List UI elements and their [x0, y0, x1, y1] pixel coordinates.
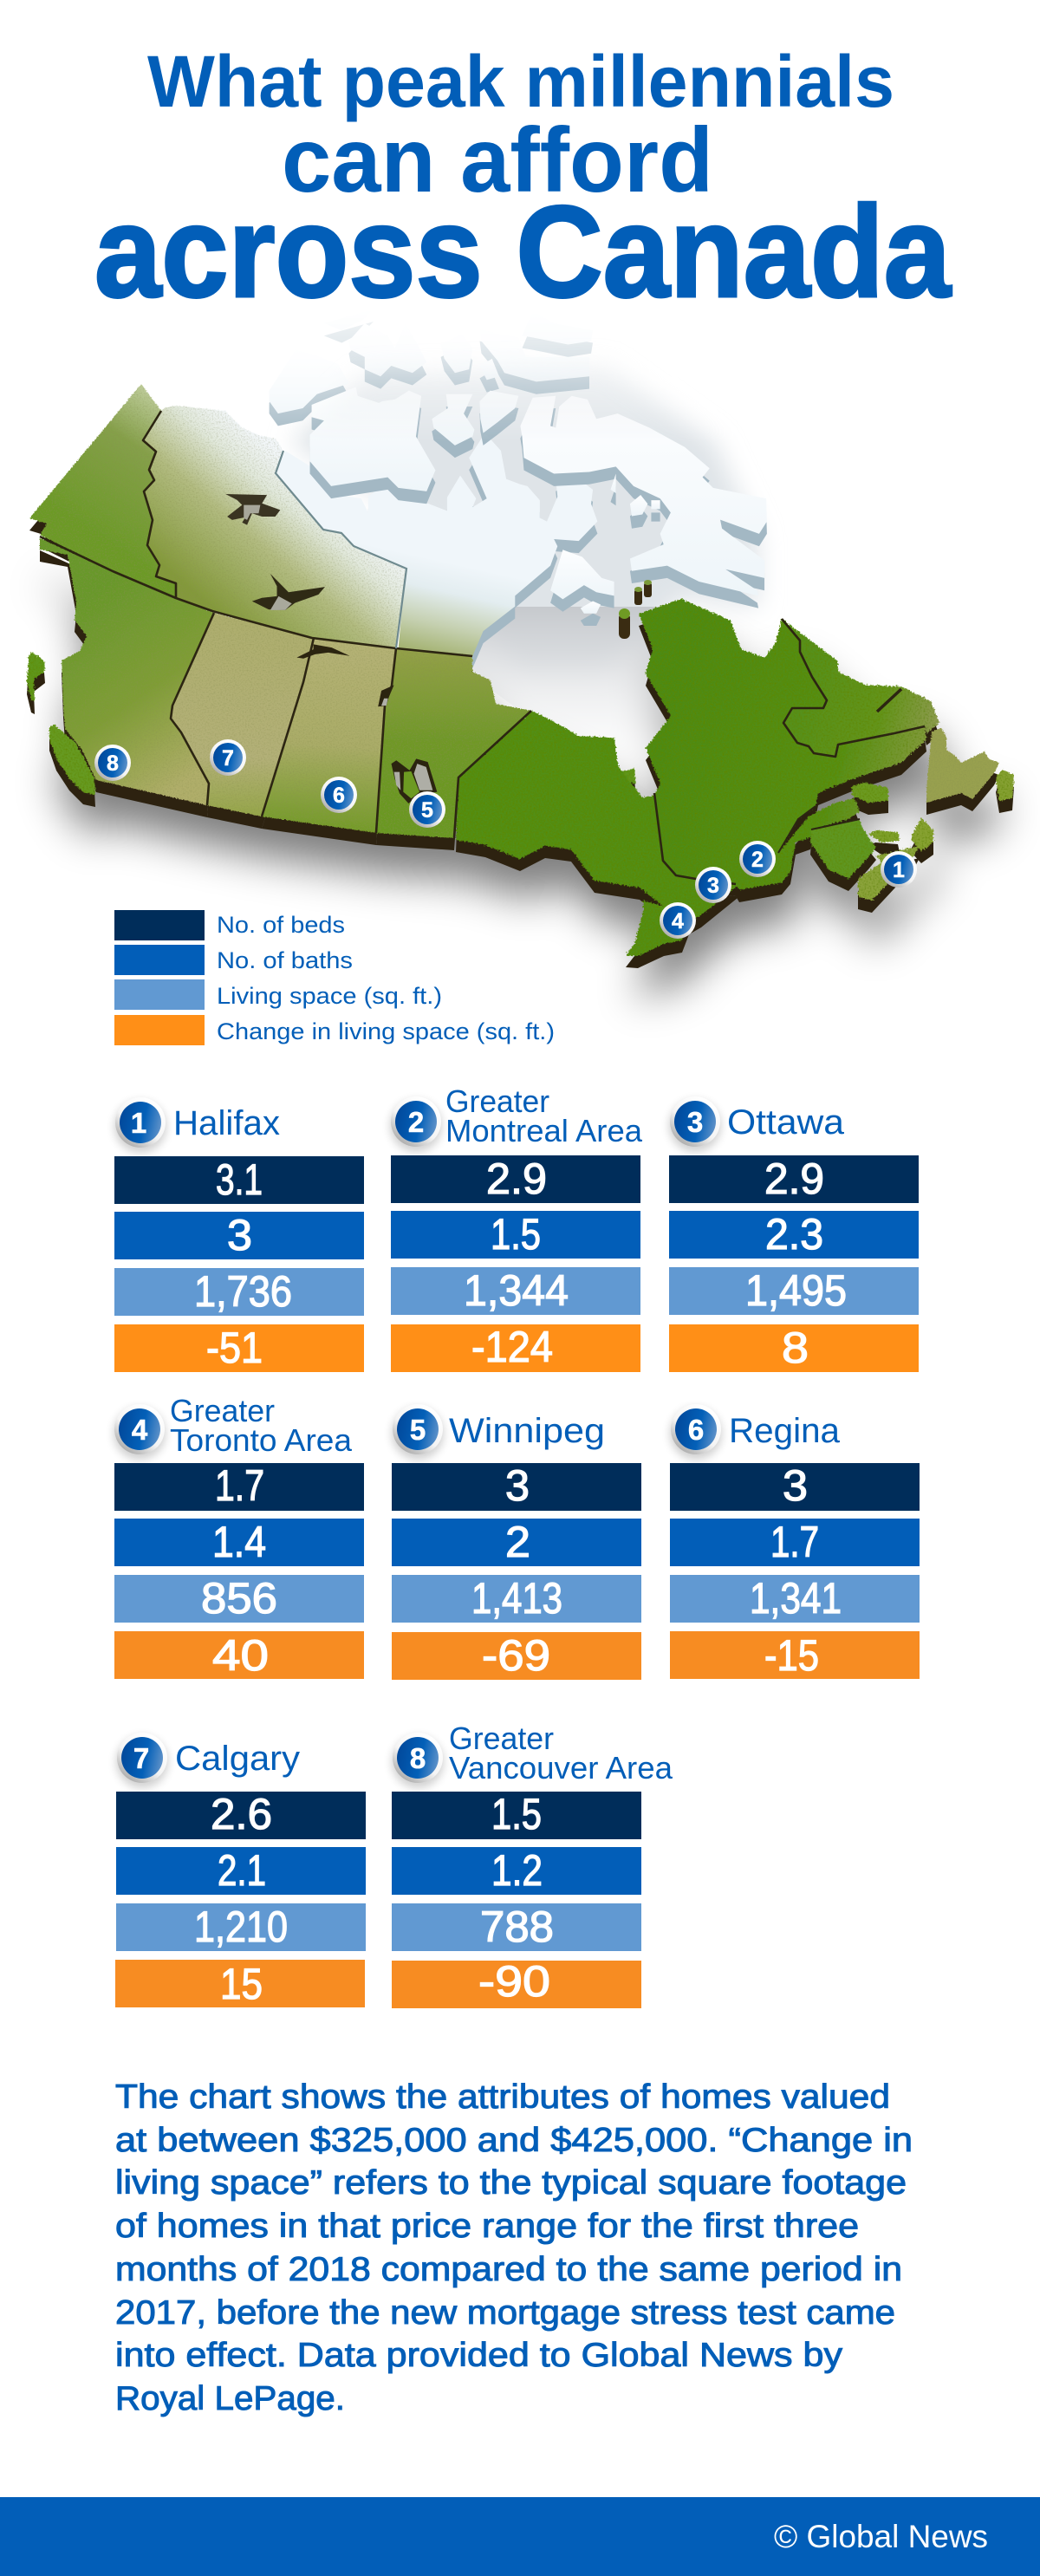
panel: Greater Toronto Area: [114, 1393, 364, 1680]
living space: 856: [201, 1574, 277, 1623]
city name: Halifax: [173, 1104, 280, 1142]
marker 6: Regina: 6: [333, 784, 345, 808]
marker 8: Vancouver: 8: [107, 751, 119, 776]
beds: 3.1: [216, 1155, 263, 1204]
living space: [114, 1267, 364, 1316]
city name: Montreal Area: [445, 1113, 643, 1148]
beds: [114, 1155, 364, 1204]
living space: [391, 1266, 640, 1315]
arctic sea shading: [293, 368, 766, 612]
change: [669, 1324, 919, 1372]
change: [670, 1631, 920, 1680]
explanatory paragraph: [115, 2078, 913, 2417]
baths: [114, 1518, 364, 1566]
prairie provinces and BC: [40, 538, 999, 838]
panel: Regina: [670, 1404, 920, 1680]
baths: [670, 1518, 920, 1566]
explanatory paragraph: of homes in that price range for the first three: [115, 2208, 859, 2245]
title line 3: across Canada: [94, 179, 952, 324]
beds: [114, 1461, 364, 1511]
beds: 1.7: [215, 1461, 264, 1510]
legend: living space: [114, 979, 442, 1010]
change: 15: [220, 1960, 263, 2008]
legend: beds: [114, 910, 345, 940]
marker 1: Halifax: 1: [893, 858, 905, 882]
beds: 1.5: [491, 1790, 542, 1838]
living space: [669, 1266, 919, 1315]
beds: [669, 1155, 919, 1203]
city name: [170, 1393, 353, 1458]
baths: [391, 1210, 640, 1259]
NWT / Nunavut border: [276, 451, 406, 648]
lakes: [225, 494, 437, 803]
explanatory paragraph: living space” refers to the typical square footage: [115, 2164, 907, 2202]
explanatory paragraph: at between $325,000 and $425,000. “Change in: [115, 2122, 913, 2159]
title: [94, 41, 952, 324]
beds: 3: [783, 1461, 808, 1510]
change: 40: [212, 1631, 269, 1680]
marker 4: Toronto: 4: [672, 909, 684, 933]
living space: 1,495: [745, 1266, 847, 1315]
change: [115, 1960, 365, 2008]
lake: Great Slave: [252, 574, 325, 610]
badge 3: 3: [687, 1106, 703, 1138]
baths: 1.2: [491, 1846, 543, 1895]
legend: living space: Living space (sq. ft.): [217, 983, 442, 1009]
baths: [116, 1846, 366, 1895]
baths: 2.3: [765, 1210, 823, 1259]
marker 5: Winnipeg: [409, 791, 445, 828]
change: [114, 1631, 364, 1680]
city name: Vancouver Area: [449, 1750, 673, 1786]
living space: [114, 1574, 364, 1623]
baths: 1.5: [491, 1210, 541, 1259]
marker 5: Winnipeg: 5: [421, 798, 433, 823]
footer bar: [0, 2497, 1040, 2576]
panel: Ottawa: [669, 1096, 919, 1372]
island side walls: [270, 322, 767, 626]
explanatory paragraph: months of 2018 compared to the same period in: [115, 2251, 902, 2288]
beds: [116, 1790, 366, 1839]
panel: Greater Vancouver Area: [392, 1721, 673, 2008]
baths: 3: [227, 1211, 252, 1259]
marker 2: Montreal: [739, 841, 776, 877]
change: -90: [478, 1957, 550, 2006]
marker 2: Montreal: 2: [751, 848, 764, 872]
legend: change in living space: Change in living space (sq. ft.): [217, 1018, 555, 1044]
change: [392, 1957, 641, 2008]
living space: 788: [480, 1903, 554, 1951]
baths: 2: [505, 1518, 530, 1566]
living space: [116, 1903, 366, 1951]
arctic islands: [270, 309, 767, 626]
living space: 1,210: [194, 1903, 288, 1951]
change: -51: [206, 1324, 263, 1372]
legend: beds: No. of beds: [217, 912, 345, 938]
badge 7: 7: [133, 1742, 149, 1774]
beds: [391, 1155, 640, 1203]
explanatory paragraph: 2017, before the new mortgage stress test came: [115, 2294, 895, 2332]
legend: baths: [114, 945, 353, 975]
marker 3: Ottawa: [695, 867, 731, 903]
provincial borders: [40, 411, 925, 884]
central and Atlantic provinces: [27, 599, 1014, 956]
badge 6: 6: [688, 1414, 704, 1446]
city name: Ottawa: [727, 1103, 845, 1142]
badge 2: 2: [408, 1106, 424, 1138]
map of Canada: [27, 309, 1014, 998]
baths: [114, 1211, 364, 1259]
living space: 1,413: [471, 1574, 562, 1623]
city name: Regina: [729, 1412, 841, 1450]
marker 8: Vancouver: [94, 745, 131, 781]
Hudson Bay shading: [472, 607, 685, 797]
city name: Greater: [445, 1083, 549, 1119]
title line 2: can afford: [282, 109, 713, 211]
city name: Greater: [170, 1393, 275, 1428]
change: -69: [482, 1631, 550, 1680]
panel: Winnipeg: [392, 1404, 641, 1680]
living space: [392, 1574, 641, 1623]
baths: [392, 1846, 641, 1895]
legend: baths: No. of baths: [217, 947, 353, 973]
badge 4: 4: [132, 1414, 148, 1446]
living space: 1,341: [750, 1574, 842, 1623]
change: [391, 1323, 640, 1372]
footer credit: © Global News: [774, 2519, 988, 2554]
lake: Reindeer: [378, 685, 394, 706]
arctic mainland side wall: [275, 446, 597, 668]
badge 8: [392, 1733, 444, 1788]
beds: [392, 1790, 641, 1839]
explanatory paragraph: Royal LePage.: [115, 2380, 345, 2417]
marker 7: Calgary: [210, 739, 246, 776]
city name: Greater: [449, 1721, 554, 1756]
panel: Calgary: [115, 1733, 366, 2008]
badge 6: [670, 1404, 722, 1460]
map drop shadow: [47, 580, 1006, 998]
city name: Winnipeg: [449, 1412, 605, 1450]
beds: 2.9: [486, 1155, 547, 1203]
marker 6: Regina: [321, 777, 357, 813]
marker 7: Calgary: 7: [222, 746, 234, 771]
legend: change in living space: [114, 1015, 555, 1045]
marker 3: Ottawa: 3: [707, 874, 719, 898]
change: [392, 1631, 641, 1680]
Nunavut mainland: [275, 433, 597, 656]
badge 1: 1: [131, 1107, 146, 1139]
beds: 2.6: [211, 1790, 272, 1838]
small green Foxe Basin islands: [619, 580, 652, 639]
explanatory paragraph: The chart shows the attributes of homes valued: [115, 2078, 890, 2116]
territories: Yukon, NWT, Nunavut mainland: [29, 384, 406, 648]
legend: [114, 910, 555, 1045]
beds: [392, 1461, 641, 1511]
island tops: [270, 309, 767, 614]
badge 8: 8: [410, 1742, 426, 1774]
beds: 3: [505, 1461, 530, 1510]
baths: 1.7: [770, 1518, 819, 1566]
badge 5: [392, 1404, 444, 1460]
badge 1: [114, 1097, 166, 1153]
badge 4: [114, 1404, 166, 1460]
lake: Athabasca: [296, 644, 350, 659]
change: 8: [782, 1324, 809, 1372]
living space: 1,344: [464, 1266, 569, 1315]
land side walls: [27, 396, 1014, 968]
change: -15: [764, 1631, 819, 1680]
change: [114, 1324, 364, 1372]
badge 3: [669, 1096, 721, 1152]
marker 4: Toronto: [660, 902, 696, 939]
living space: [670, 1574, 920, 1623]
lake: Winnipeg: [392, 758, 437, 803]
living space: 1,736: [194, 1267, 292, 1316]
badge 2: [390, 1096, 442, 1152]
baths: [392, 1518, 641, 1566]
title line 1: What peak millennials: [147, 41, 894, 122]
panel: Greater Montreal Area: [390, 1083, 643, 1372]
marker 1: Halifax: [881, 851, 917, 888]
explanatory paragraph: into effect. Data provided to Global News by: [115, 2337, 843, 2374]
city name: [445, 1083, 643, 1148]
beds: [670, 1461, 920, 1511]
city name: Calgary: [175, 1740, 300, 1778]
map markers: [94, 739, 917, 939]
city name: [449, 1721, 673, 1786]
change: -124: [471, 1323, 553, 1371]
city name: Toronto Area: [170, 1422, 353, 1458]
lake: Great Bear: [225, 494, 280, 525]
baths: 1.4: [212, 1518, 266, 1566]
baths: 2.1: [218, 1846, 266, 1895]
baths: [669, 1210, 919, 1259]
beds: 2.9: [764, 1155, 824, 1203]
badge 5: 5: [410, 1414, 426, 1446]
badge 7: [116, 1733, 168, 1788]
living space: [392, 1903, 641, 1951]
panel: Halifax: [114, 1097, 364, 1372]
